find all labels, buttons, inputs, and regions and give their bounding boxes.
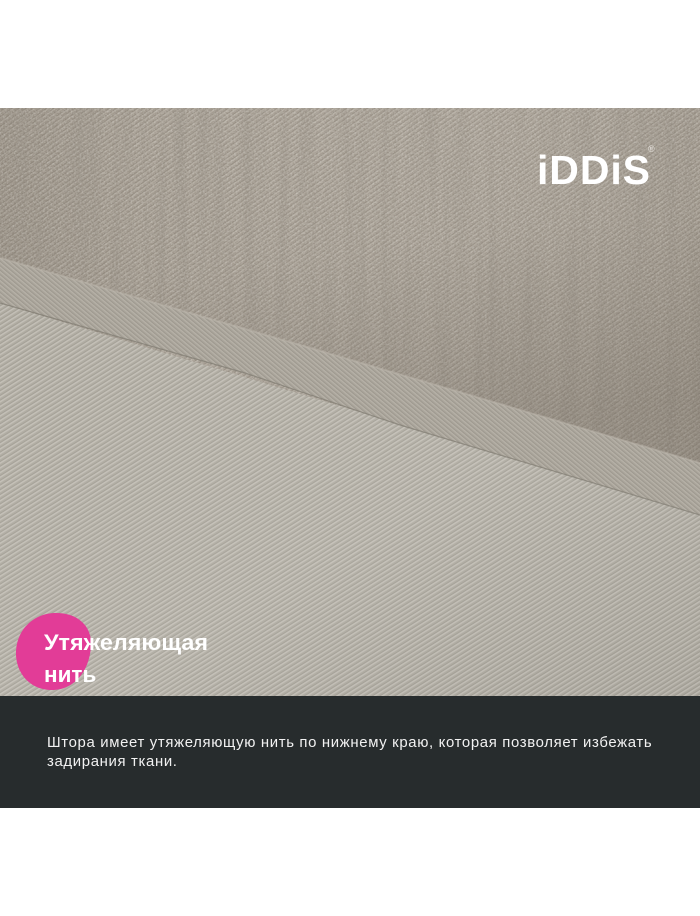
- text block: description: задирания ткани.: [47, 754, 178, 770]
- heading: нить: [44, 662, 96, 687]
- upper curtain fabric: [0, 108, 700, 468]
- panel: description band: [0, 696, 700, 808]
- photo: fabric close-up with logo and heading: [0, 108, 700, 696]
- logo: iDDiS: ®: [648, 144, 655, 154]
- heading: Утяжеляющая: [44, 630, 208, 655]
- lower curtain fabric: [0, 303, 700, 696]
- heading: [44, 630, 208, 687]
- text block: description: [47, 735, 652, 770]
- text block: description: Штора имеет утяжеляющую нить по нижнему краю, которая позволяет избежать: [47, 735, 652, 751]
- logo: iDDiS: iDDiS: [537, 147, 650, 193]
- hem with weighted thread: [0, 258, 700, 515]
- icon: pink circle accent: [16, 613, 91, 690]
